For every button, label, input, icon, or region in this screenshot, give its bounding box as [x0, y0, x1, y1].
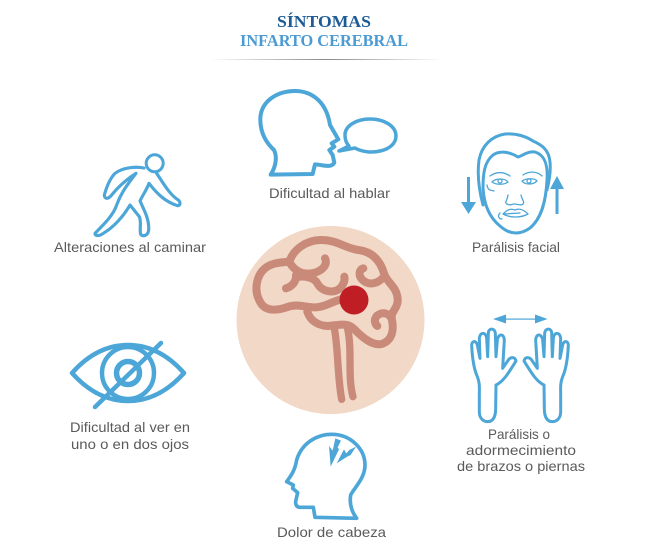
arrow: horizontal: [493, 314, 548, 324]
right hand: [524, 329, 568, 422]
face outline: [483, 152, 547, 233]
brain outline: [256, 240, 398, 399]
central brain illustration: [236, 226, 424, 414]
label: headache: Dolor de cabeza: [277, 524, 386, 540]
speech bubble: [339, 119, 396, 152]
label: hands: [457, 426, 585, 474]
label: hands: de brazos o piernas: [457, 458, 585, 474]
icon: speaking head: [260, 91, 396, 175]
title: INFARTO CEREBRAL: [240, 31, 408, 50]
stroke marker: [340, 286, 368, 314]
icon: headache head: [287, 434, 365, 518]
label: vision: [70, 419, 190, 452]
title: SÍNTOMAS: [277, 12, 371, 31]
icon: crossed eye: [72, 343, 184, 407]
arrow: up: [550, 176, 564, 214]
hair: [478, 134, 550, 205]
label: walking: Alteraciones al caminar: [54, 239, 206, 255]
label: speech: Dificultad al hablar: [269, 185, 390, 201]
lightning bolts: [329, 438, 356, 467]
title: [240, 12, 408, 50]
label: vision: Dificultad al ver en: [70, 419, 190, 435]
label: face: Parálisis facial: [472, 239, 560, 255]
label: hands: Parálisis o: [488, 426, 550, 442]
label: hands: adormecimiento: [466, 442, 576, 458]
left hand: [472, 329, 516, 422]
icon: facial paralysis: [478, 134, 550, 233]
arrow: down: [461, 177, 476, 214]
facial features: [487, 172, 542, 219]
icon: walking figure: [95, 155, 180, 236]
label: vision: uno o en dos ojos: [71, 436, 189, 452]
icon: hands: [472, 314, 568, 422]
